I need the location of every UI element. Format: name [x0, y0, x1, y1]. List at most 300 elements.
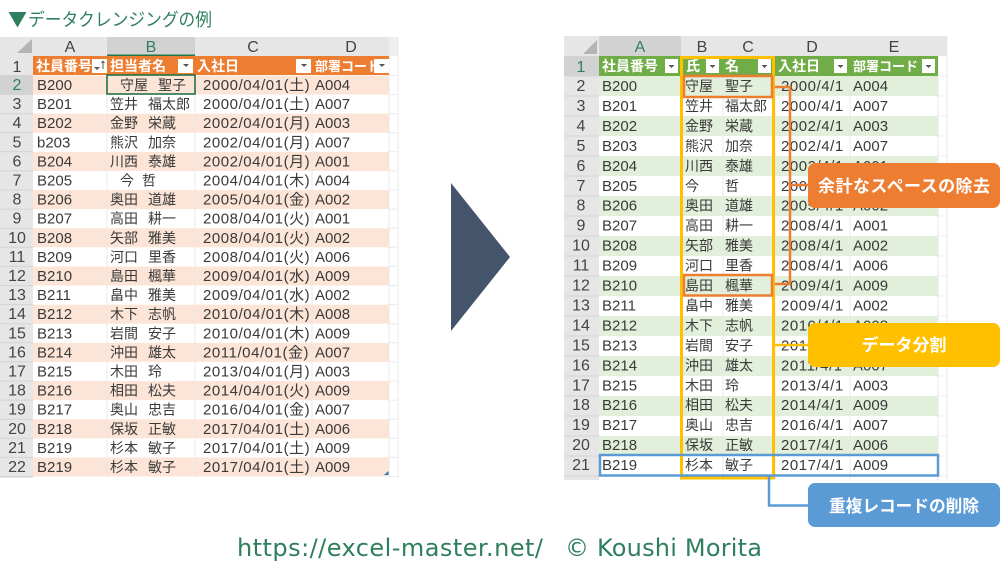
- row 7: 7: [13, 172, 22, 190]
- row 16: A007: [853, 357, 888, 374]
- row 18: B216: [602, 397, 637, 414]
- title: [8, 5, 212, 32]
- row 2: 守屋: [120, 77, 148, 93]
- row 4: B202: [602, 118, 637, 135]
- row 4: A003: [853, 118, 888, 135]
- row 15: A009: [853, 337, 888, 354]
- row 13: [572, 297, 888, 314]
- row 4: 4: [577, 118, 586, 135]
- row 7: 2004/4/1: [781, 178, 844, 195]
- row 5: 2002/04/01(月): [203, 134, 310, 151]
- row 19: 奥山: [685, 417, 713, 433]
- row 2: 聖子: [725, 78, 753, 94]
- row 18: 相田: [685, 397, 713, 413]
- row 21: A009: [315, 440, 350, 457]
- row 8: 道雄: [725, 198, 753, 214]
- row 21: 敏子: [725, 457, 753, 473]
- row 5: 5: [13, 134, 22, 151]
- row 17: 木田: [110, 364, 138, 380]
- row 2: 聖子: [158, 77, 186, 93]
- row 2: 守屋: [685, 78, 713, 94]
- row 13: B211: [602, 297, 636, 314]
- row 6: 6: [13, 153, 22, 170]
- green table header row: 名: [725, 58, 739, 74]
- row 17: A003: [853, 377, 888, 394]
- row 15: 安子: [148, 325, 176, 341]
- row 20: B218: [37, 421, 72, 438]
- row 2: [577, 78, 888, 95]
- row 20: 20: [572, 437, 590, 454]
- row 11: B209: [602, 258, 637, 275]
- column headers A to E: C: [742, 39, 754, 56]
- column headers A to E: E: [889, 39, 899, 56]
- row 8: A002: [853, 198, 888, 215]
- row 18: 18: [8, 383, 26, 400]
- row 15: [8, 325, 350, 342]
- row 3: [577, 98, 888, 115]
- title: ▼: [8, 5, 27, 32]
- column headers A to D: [65, 39, 357, 56]
- row 4: 栄蔵: [148, 115, 176, 131]
- row 5: 加奈: [725, 138, 753, 154]
- row 2: B200: [602, 78, 637, 95]
- row 13: [8, 287, 350, 304]
- row 21: 2017/04/01(土): [203, 440, 310, 457]
- row 21: 杉本: [685, 457, 713, 473]
- row 9: B207: [37, 211, 72, 228]
- row 14: 14: [8, 306, 26, 323]
- row 22: 杉本: [110, 459, 138, 475]
- column headers A to E: [635, 39, 899, 56]
- row 7: 哲: [142, 172, 156, 188]
- row 6: B204: [602, 158, 637, 175]
- connector: duplicate removal: [769, 476, 808, 506]
- row 1 number: 1: [577, 59, 586, 76]
- row 19: 忠吉: [725, 417, 753, 433]
- row 16: [572, 357, 888, 374]
- orange table header row: [33, 56, 389, 75]
- arrow: before to after: [451, 183, 510, 331]
- row 16: [8, 344, 350, 361]
- row 12: [572, 278, 888, 294]
- row 2: 2: [13, 77, 22, 94]
- row 9: 耕一: [725, 218, 753, 234]
- row 5: 5: [577, 138, 586, 155]
- table resize handle: [384, 471, 388, 475]
- row 10: 2008/4/1: [781, 238, 844, 255]
- row 12: 楓華: [148, 268, 176, 284]
- row 12: B210: [37, 268, 72, 285]
- row 6: [577, 158, 888, 175]
- row 6: [13, 153, 350, 170]
- row 21: 2017/4/1: [781, 457, 844, 474]
- row 9: 高田: [685, 218, 713, 234]
- row 18: [572, 397, 888, 414]
- row 20: 正敏: [725, 437, 753, 453]
- row 9: A001: [853, 218, 888, 235]
- column headers A to D: D: [345, 39, 357, 56]
- row 2: A004: [315, 77, 350, 94]
- row 10: 雅美: [725, 238, 753, 254]
- row 10: A002: [315, 230, 350, 247]
- row 13: A002: [315, 287, 350, 304]
- row 15: B213: [602, 337, 637, 354]
- row 20: 2017/04/01(土): [203, 421, 310, 438]
- row 2: [13, 77, 350, 94]
- row 19: 19: [8, 402, 26, 419]
- row 6: 泰雄: [725, 158, 753, 174]
- row 7: [13, 172, 350, 190]
- row 12: A009: [853, 278, 888, 294]
- column headers A to D: A: [65, 39, 76, 56]
- row 20: A006: [315, 421, 350, 438]
- row 8: B206: [602, 198, 637, 215]
- row 17: [8, 364, 350, 380]
- row 2: 2: [577, 78, 586, 95]
- row 12: 12: [8, 268, 26, 285]
- row 21: [8, 440, 350, 457]
- green table header row: [599, 56, 938, 76]
- column headers A to D: C: [247, 39, 259, 56]
- callout: remove duplicate records: 重複レコードの削除: [829, 496, 979, 516]
- row 21: B219: [37, 440, 72, 457]
- row 11: 里香: [725, 258, 753, 274]
- row 22: 2017/04/01(土): [203, 459, 310, 476]
- row 10: B208: [602, 238, 637, 255]
- row 5: A007: [853, 138, 888, 155]
- green table header row: 氏: [686, 58, 700, 74]
- row 6: 6: [577, 158, 586, 175]
- row 6: A001: [315, 153, 350, 170]
- row 21: 杉本: [110, 440, 138, 456]
- row 15: 岩間: [685, 337, 713, 353]
- row 1 number: 1: [13, 59, 22, 76]
- row 11: B209: [37, 249, 72, 266]
- row 6: 2002/04/01(月): [203, 153, 310, 170]
- row 17: A003: [315, 364, 350, 380]
- row 15: A009: [315, 325, 350, 342]
- row 20: 正敏: [148, 421, 176, 437]
- row 22: 敏子: [148, 459, 176, 475]
- row 4: 2002/04/01(月): [203, 115, 310, 132]
- orange table header row: 社員番号: [36, 58, 92, 74]
- row 10: [572, 238, 888, 255]
- footer: url and copyright: © Koushi Morita: [565, 534, 762, 562]
- row 13: 13: [572, 297, 590, 314]
- row 14: A008: [315, 306, 350, 323]
- row 13: 13: [8, 287, 26, 304]
- row 5: 熊沢: [110, 134, 138, 150]
- panel: source table before cleansing: [0, 36, 398, 478]
- row 2: A004: [853, 78, 888, 95]
- row 5: B203: [602, 138, 637, 155]
- row 17: B215: [602, 377, 637, 394]
- row 7: 2004/04/01(木): [203, 172, 310, 190]
- callout: data split: データ分割: [862, 335, 946, 355]
- row 18: B216: [37, 383, 72, 400]
- row 14: 14: [572, 317, 590, 334]
- row 14: 木下: [110, 306, 138, 322]
- row 15: 15: [8, 325, 26, 342]
- row 17: 玲: [148, 364, 162, 380]
- row 17: 木田: [685, 377, 713, 393]
- row 21: A009: [853, 457, 888, 474]
- row 10: [8, 230, 350, 247]
- row 18: 18: [572, 397, 590, 414]
- footer: url and copyright: https://excel-master.net/: [237, 534, 544, 562]
- row 21: 敏子: [148, 440, 176, 456]
- row 18: [8, 383, 350, 400]
- row 16: A007: [315, 344, 350, 361]
- row 10: 10: [572, 238, 590, 255]
- row 5: [13, 134, 350, 151]
- row 15: [572, 337, 888, 354]
- row 12: 楓華: [725, 278, 753, 294]
- row 5: [577, 138, 888, 155]
- row 4: 金野: [685, 118, 713, 134]
- row 13: 雅美: [148, 287, 176, 303]
- row 14: 志帆: [148, 306, 176, 322]
- row 14: 2010/4/1: [781, 317, 844, 334]
- row 8: [577, 198, 888, 215]
- row 13: 雅美: [725, 297, 753, 313]
- row 15: 2010/04/01(木): [203, 325, 310, 342]
- row 4: 2002/4/1: [781, 118, 844, 135]
- row 11: A006: [853, 258, 888, 275]
- row 5: A007: [315, 134, 350, 151]
- row 16: 16: [572, 357, 590, 374]
- row 16: 沖田: [685, 357, 713, 373]
- callout: remove extra spaces: [808, 163, 1000, 208]
- row 5: b203: [37, 134, 70, 151]
- row 16: 2011/4/1: [781, 357, 843, 374]
- row 12: A009: [315, 268, 350, 285]
- row 21: 21: [572, 457, 590, 474]
- green table header row: 部署コード: [853, 59, 918, 74]
- row 17: 2013/04/01(月): [203, 364, 310, 380]
- row 14: 2010/04/01(木): [203, 306, 310, 323]
- row 17: 17: [572, 377, 590, 394]
- row 19: A007: [853, 417, 888, 434]
- row 19: 2016/4/1: [781, 417, 844, 434]
- row 22: 22: [8, 459, 26, 476]
- row 18: 相田: [110, 383, 138, 399]
- row 6: A001: [853, 158, 888, 175]
- row 9: 2008/04/01(火): [203, 211, 310, 228]
- column headers A to D: B: [146, 39, 156, 56]
- row 3: 笠井: [685, 98, 713, 114]
- footer: url and copyright: [237, 534, 762, 562]
- highlight: duplicate record: [600, 455, 938, 476]
- row 6: 泰雄: [148, 153, 176, 169]
- row 15: 15: [572, 337, 590, 354]
- row 21: B219: [602, 457, 637, 474]
- row 16: 雄太: [148, 344, 176, 360]
- row 8: B206: [37, 192, 72, 209]
- orange table header row: 部署コード: [315, 59, 380, 74]
- row 7: 7: [577, 178, 586, 195]
- row 3: 3: [577, 98, 586, 115]
- row 22: A009: [315, 459, 350, 476]
- row 19: A007: [315, 402, 350, 419]
- row 7: A004: [853, 178, 888, 195]
- row 5: 熊沢: [685, 138, 713, 154]
- row 20: 保坂: [110, 421, 138, 437]
- row 19: B217: [602, 417, 637, 434]
- panel: result table after cleansing: [564, 36, 947, 480]
- row 13: 畠中: [110, 287, 138, 303]
- row 6: 川西: [685, 158, 713, 174]
- row 4: [577, 118, 888, 135]
- row 3: A007: [315, 96, 350, 113]
- row 17: [572, 377, 888, 394]
- row 7: 今: [120, 172, 134, 188]
- row 16: B214: [37, 344, 72, 361]
- row 10: A002: [853, 238, 888, 255]
- row 3: A007: [853, 98, 888, 115]
- row 4: [13, 115, 350, 132]
- row 9: 耕一: [148, 211, 176, 227]
- callout: data split: [808, 323, 1000, 367]
- row 12: B210: [602, 278, 637, 294]
- row 9: A001: [315, 211, 350, 228]
- row 19: 奥山: [110, 402, 138, 418]
- highlight: space removal row 2: [684, 76, 772, 97]
- row 21: 21: [8, 440, 26, 457]
- row 2: B200: [37, 77, 72, 94]
- row 16: 沖田: [110, 344, 138, 360]
- row 9: 9: [577, 218, 586, 235]
- row 20: B218: [602, 437, 637, 454]
- row 14: B212: [602, 317, 637, 334]
- row 12: 島田: [685, 278, 713, 294]
- row 20: A006: [853, 437, 888, 454]
- row 14: B212: [37, 306, 72, 323]
- row 7: B205: [602, 178, 637, 195]
- row 20: [572, 437, 888, 454]
- row 15: 岩間: [110, 325, 138, 341]
- row 11: 2008/4/1: [781, 258, 844, 275]
- row 10: B208: [37, 230, 72, 247]
- row 6: 川西: [110, 153, 138, 169]
- selected cell outline: [107, 75, 195, 94]
- row 10: 10: [8, 230, 26, 247]
- row 15: 2010/4/1: [781, 337, 844, 354]
- row 20: [8, 421, 350, 438]
- orange table header row: 入社日: [197, 58, 239, 74]
- row 19: [8, 402, 350, 419]
- row 16: 雄太: [725, 357, 753, 373]
- row 10: 矢部: [110, 230, 138, 246]
- row 11: 2008/04/01(火): [203, 249, 310, 266]
- row 19: B217: [37, 402, 72, 419]
- row 11: 河口: [110, 249, 138, 265]
- row 10: 2008/04/01(火): [203, 230, 310, 247]
- row 4: 栄蔵: [725, 118, 753, 134]
- green table header row: 社員番号: [602, 58, 658, 74]
- row 14: [8, 306, 350, 323]
- row 10: 雅美: [148, 230, 176, 246]
- row 7: A004: [315, 172, 350, 190]
- row 9: 2008/4/1: [781, 218, 844, 235]
- row 3: B201: [602, 98, 637, 115]
- row 18: 松夫: [725, 397, 753, 413]
- row 11: 里香: [148, 249, 176, 265]
- row 13: 2009/04/01(水): [203, 287, 310, 304]
- row 8: 2005/4/1: [781, 198, 844, 215]
- row 20: 保坂: [685, 437, 713, 453]
- callout: remove duplicate records: [808, 483, 1000, 527]
- highlight: space removal row 12: [684, 275, 772, 296]
- row 8: 奥田: [685, 198, 713, 214]
- row 16: 2011/04/01(金): [203, 344, 309, 361]
- row 3: 2000/4/1: [781, 98, 844, 115]
- green table header row: 入社日: [778, 58, 820, 74]
- row 12: 12: [572, 278, 590, 294]
- row 9: 9: [13, 211, 22, 228]
- row 13: 2009/4/1: [781, 297, 844, 314]
- row 13: A002: [853, 297, 888, 314]
- connector: space removal: [775, 87, 808, 284]
- row 18: 2014/04/01(火): [203, 383, 310, 400]
- row 14: 志帆: [725, 317, 753, 333]
- row 9: 高田: [110, 211, 138, 227]
- column headers A to E: A: [635, 39, 646, 56]
- row 4: B202: [37, 115, 72, 132]
- row 7: 今: [685, 178, 699, 194]
- row 18: A009: [853, 397, 888, 414]
- row 14: A008: [853, 317, 888, 334]
- row 18: 松夫: [148, 383, 176, 399]
- row 9: [577, 218, 888, 235]
- row 11: 11: [573, 258, 589, 275]
- row 16: 16: [8, 344, 26, 361]
- row 11: 11: [9, 249, 25, 266]
- row 2: 2000/4/1: [781, 78, 844, 95]
- row 8: 奥田: [110, 192, 138, 208]
- row 14: [572, 317, 888, 334]
- row 8: 8: [13, 192, 22, 209]
- row 18: A009: [315, 383, 350, 400]
- row 8: A002: [315, 192, 350, 209]
- row 17: 玲: [725, 377, 739, 393]
- row 12: [8, 268, 350, 285]
- callout: remove extra spaces: 余計なスペースの除去: [818, 177, 990, 196]
- row 12: 2009/04/01(水): [203, 268, 310, 285]
- row 3: 笠井: [110, 96, 138, 112]
- row 21: [572, 457, 888, 474]
- row 15: B213: [37, 325, 72, 342]
- row 6: 2002/4/1: [781, 158, 844, 175]
- row 11: A006: [315, 249, 350, 266]
- row 17: 2013/4/1: [781, 377, 844, 394]
- highlight: split name columns: [682, 58, 774, 478]
- row 16: B214: [602, 357, 637, 374]
- row 17: B215: [37, 364, 72, 380]
- row 3: 福太郎: [148, 96, 190, 112]
- row 22: [8, 459, 350, 476]
- row 3: [13, 96, 350, 113]
- row 4: 4: [13, 115, 22, 132]
- row 8: 2005/04/01(金): [203, 192, 310, 209]
- row 19: [572, 417, 888, 434]
- row 5: 加奈: [148, 134, 176, 150]
- row 3: 2000/04/01(土): [203, 96, 310, 113]
- row 22: B219: [37, 459, 72, 476]
- row 5: 2002/4/1: [781, 138, 844, 155]
- title: データクレンジングの例: [28, 10, 212, 30]
- row 19: 忠吉: [148, 402, 176, 418]
